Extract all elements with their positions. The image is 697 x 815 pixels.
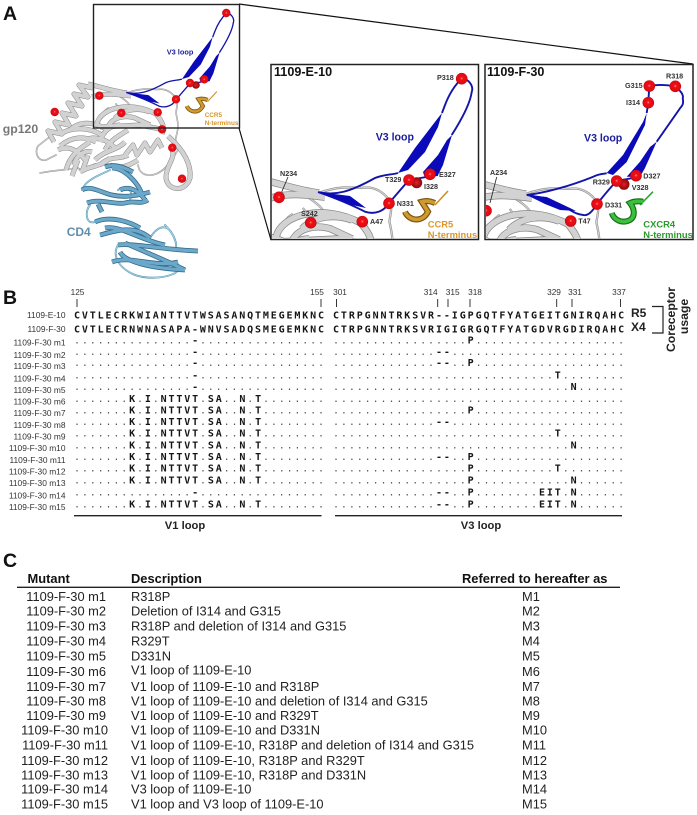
table: mutant column: 1109-F-30 m2 xyxy=(26,604,106,619)
sequence labels: 1109-F-30 m7 xyxy=(14,408,66,418)
table: mutant column: 1109-F-30 m15 xyxy=(21,796,108,811)
residue position numbers and ticks: 318 xyxy=(468,287,482,297)
CCR5 label: N-terminus xyxy=(428,229,477,240)
residue position numbers and ticks: 155 xyxy=(310,287,324,297)
CCR5 N-terminus helix xyxy=(405,191,448,219)
table: mutant column: 1109-F-30 m7 xyxy=(26,679,106,694)
table: description column: R318P xyxy=(131,589,170,604)
table: mutant column: 1109-F-30 m1 xyxy=(26,589,106,604)
V3 loop sequence alignment: .............--..P................... xyxy=(333,452,626,463)
residue position numbers and ticks: 315 xyxy=(446,287,460,297)
table: referred-to column: M2 xyxy=(522,604,540,619)
table header: Mutant xyxy=(28,571,70,586)
V3 loop label: V3 loop xyxy=(584,133,623,145)
V3 loop sequence alignment: .................P............N...... xyxy=(333,475,626,486)
table: referred-to column: M8 xyxy=(522,694,540,709)
residue labels: N331 xyxy=(397,199,414,208)
V1 loop sequence alignment: ...............-................ xyxy=(74,371,326,382)
sequence labels: 1109-F-30 m13 xyxy=(9,478,66,488)
table: referred-to column: M1 xyxy=(522,589,540,604)
table: mutant column: 1109-F-30 m6 xyxy=(26,664,106,679)
panel letter C: C xyxy=(3,550,17,572)
table header rule xyxy=(17,586,620,588)
overview labels xyxy=(3,47,239,239)
overview labels: V3 loop xyxy=(167,47,194,56)
table: referred-to column: M7 xyxy=(522,679,540,694)
table: description column xyxy=(131,589,474,811)
sequence labels xyxy=(9,310,66,512)
table: referred-to column: M10 xyxy=(522,722,547,737)
table: referred-to column xyxy=(522,589,547,811)
residue position numbers and ticks: 329 xyxy=(547,287,561,297)
sequence labels: 1109-F-30 m9 xyxy=(14,432,66,442)
table: referred-to column: M15 xyxy=(522,796,547,811)
CXCR4 label: CXCR4 xyxy=(643,219,676,230)
sequence labels: 1109-F-30 m1 xyxy=(14,338,66,348)
V1 loop sequence alignment: .......K.I.NTTVT.SA..N.T........ xyxy=(74,464,326,475)
ribbon: gp120 xyxy=(36,84,190,188)
panel letter B: B xyxy=(3,287,17,309)
gray ribbon backdrop xyxy=(272,178,394,239)
residue labels: N234 xyxy=(280,169,297,178)
sequence labels: 1109-F-30 m6 xyxy=(14,396,66,406)
V1 loop sequence alignment: .......K.I.NTTVT.SA..N.T........ xyxy=(74,405,326,416)
V1 loop sequence alignment: .......K.I.NTTVT.SA..N.T........ xyxy=(74,499,326,510)
V3 loop sequence alignment: ............................T........ xyxy=(333,429,626,440)
overview residue spheres xyxy=(50,9,230,183)
table header: Description xyxy=(131,571,202,586)
residue labels: T47 xyxy=(578,216,591,225)
coreceptor labels R5 and X4 xyxy=(631,306,647,334)
table: mutant column: 1109-F-30 m14 xyxy=(21,782,108,797)
residue labels: R329 xyxy=(593,177,610,186)
table: referred-to column: M12 xyxy=(522,753,547,768)
table: mutant column: 1109-F-30 m8 xyxy=(26,694,106,709)
connector lines: overview to detail panels xyxy=(239,4,693,240)
ribbon: CD4 xyxy=(82,166,198,278)
sequence labels: 1109-F-30 m3 xyxy=(14,361,66,371)
V3 loop sequence alignment: .............--...................... xyxy=(333,347,626,358)
table: description column: V1 loop of 1109-E-10 and D331N xyxy=(131,722,320,737)
sequence labels: 1109-F-30 m12 xyxy=(9,466,66,476)
V3 loop sequence alignment: .................P................... xyxy=(333,405,626,416)
V3 loop sequence alignment: CTRPGNNTRKSVR--IGPGQTFYATGEITGNIRQAHC xyxy=(333,310,626,321)
V3 loop in overview xyxy=(126,13,234,112)
V3 loop sequence alignment: .............--..P........EIT.N...... xyxy=(333,499,626,510)
table: mutant column: 1109-F-30 m5 xyxy=(26,648,106,663)
coreceptor usage label xyxy=(664,287,691,352)
residue position numbers and ticks: 331 xyxy=(568,287,582,297)
V3 loop ribbon xyxy=(527,85,683,215)
table: referred-to column: M13 xyxy=(522,767,547,782)
residue labels: A234 xyxy=(490,168,507,177)
table: mutant column: 1109-F-30 m12 xyxy=(21,753,108,768)
panel letter A: A xyxy=(3,3,17,25)
V1 loop sequence alignment: .......K.I.NTTVT.SA..N.T........ xyxy=(74,429,326,440)
V1 loop bracket and label: V1 loop xyxy=(165,520,205,532)
V1 loop sequence alignment xyxy=(74,310,326,510)
sequence labels: 1109-E-10 xyxy=(27,310,66,320)
sequence labels: 1109-F-30 m2 xyxy=(14,350,66,360)
V3 loop sequence alignment: .............--..P................... xyxy=(333,358,626,369)
coreceptor bracket xyxy=(652,306,663,333)
N234 leader line xyxy=(282,177,288,192)
V1 loop sequence alignment: .......K.I.NTTVT.SA..N.T........ xyxy=(74,440,326,451)
coreceptor usage label: usage xyxy=(677,299,691,334)
residue spheres xyxy=(480,80,681,227)
V3 loop sequence alignment: ............................T........ xyxy=(333,371,626,382)
table header: Referred to hereafter as xyxy=(462,571,607,586)
V1 loop sequence alignment: ...............-................ xyxy=(74,335,326,346)
sequence labels: 1109-F-30 m11 xyxy=(9,455,66,465)
table: referred-to column: M14 xyxy=(522,782,547,797)
V1 loop sequence alignment: ...............-................ xyxy=(74,347,326,358)
coreceptor usage label: Coreceptor xyxy=(664,287,678,352)
panel: 1109-E-10 detail xyxy=(270,64,480,240)
residue labels: R318 xyxy=(666,71,683,80)
overview labels: CCR5 xyxy=(205,112,223,119)
V3 loop sequence alignment: .................P..........T........ xyxy=(333,464,626,475)
table: mutant column xyxy=(21,589,108,811)
V3 loop ribbon xyxy=(318,79,472,213)
V1 loop sequence alignment: .......K.I.NTTVT.SA..N.T........ xyxy=(74,452,326,463)
residue labels: T329 xyxy=(385,175,401,184)
table: description column: V1 loop of 1109-E-10 and R329T xyxy=(131,708,319,723)
table: description column: V1 loop of 1109-E-10, R318P and deletion of I314 and G315 xyxy=(131,738,474,753)
sequence labels: 1109-F-30 m10 xyxy=(9,443,66,453)
panel: 1109-F-30 detail xyxy=(484,64,694,240)
CXCR4 N-terminus helix xyxy=(612,192,653,222)
CXCR4 label xyxy=(643,219,693,240)
table: description column: V1 loop of 1109-E-10 and R318P xyxy=(131,679,319,694)
table: description column: V3 loop of 1109-E-10 xyxy=(131,782,251,797)
overview labels: N-terminus xyxy=(205,120,239,127)
V3 loop sequence alignment: ..................................... xyxy=(333,394,626,405)
V3 loop sequence alignment: ..............................N...... xyxy=(333,440,626,451)
table: description column: R329T xyxy=(131,634,170,649)
residue spheres xyxy=(273,73,468,228)
residue labels: S242 xyxy=(301,209,318,218)
table: referred-to column: M4 xyxy=(522,634,540,649)
table: referred-to column: M9 xyxy=(522,708,540,723)
table: mutant column: 1109-F-30 m3 xyxy=(26,618,106,633)
overview labels: CD4 xyxy=(67,225,91,239)
residue labels: G315 xyxy=(625,81,643,90)
table: mutant column: 1109-F-30 m13 xyxy=(21,767,108,782)
A234 leader line xyxy=(490,177,497,203)
V1 loop sequence alignment: ...............-................ xyxy=(74,488,326,499)
table: description column: V1 loop of 1109-E-10 xyxy=(131,662,251,678)
V3 loop sequence alignment: .............--..P........EIT.N...... xyxy=(333,488,626,499)
table: description column: V1 loop and V3 loop of 1109-E-10 xyxy=(131,796,324,811)
coreceptor labels R5 and X4: R5 xyxy=(631,306,647,320)
table: description column: V1 loop of 1109-E-10, R318P and R329T xyxy=(131,753,365,768)
table: description column: V1 loop of 1109-E-10 and deletion of I314 and G315 xyxy=(131,694,428,709)
residue position numbers and ticks: 125 xyxy=(71,287,85,297)
residue position numbers and ticks: 314 xyxy=(424,287,438,297)
sequence labels: 1109-F-30 m4 xyxy=(14,374,66,384)
residue labels xyxy=(490,71,683,225)
V1 loop sequence alignment: .......K.I.NTTVT.SA..N.T........ xyxy=(74,417,326,428)
residue labels: A47 xyxy=(370,217,383,226)
sequence labels: 1109-F-30 m5 xyxy=(14,385,66,395)
V1 loop sequence alignment: CVTLECRKWIANTTVTWSASANQTMEGEMKNC xyxy=(74,310,326,321)
residue position numbers and ticks xyxy=(71,287,626,307)
table header xyxy=(28,571,607,586)
coreceptor labels R5 and X4: X4 xyxy=(631,320,646,334)
V1 loop sequence alignment: CVTLECRNWNASAPA-WNVSADQSMEGEMKNC xyxy=(74,324,326,335)
overview zoom box xyxy=(94,4,240,128)
V1 loop sequence alignment: ...............-................ xyxy=(74,358,326,369)
table: description column: V1 loop of 1109-E-10, R318P and D331N xyxy=(131,767,366,782)
table: referred-to column: M5 xyxy=(522,648,540,663)
V3 loop sequence alignment xyxy=(333,310,626,510)
CCR5 label: CCR5 xyxy=(428,219,453,230)
residue position numbers and ticks: 337 xyxy=(612,287,626,297)
residue labels: P318 xyxy=(437,73,454,82)
V1 loop sequence alignment: ...............-................ xyxy=(74,382,326,393)
residue labels: E327 xyxy=(439,170,456,179)
table: mutant column: 1109-F-30 m11 xyxy=(22,738,108,753)
sequence labels: 1109-F-30 m14 xyxy=(9,490,66,500)
residue labels: I314 xyxy=(626,98,640,107)
V3 loop label: V3 loop xyxy=(376,132,414,144)
panel title: 1109-F-30 xyxy=(487,65,544,79)
sequence labels: 1109-F-30 m8 xyxy=(14,420,66,430)
V3 loop sequence alignment: .............--...................... xyxy=(333,417,626,428)
table: description column: R318P and deletion of I314 and G315 xyxy=(131,618,346,633)
table: mutant column: 1109-F-30 m10 xyxy=(21,722,108,737)
residue labels: I328 xyxy=(424,182,438,191)
table: description column: Deletion of I314 and G315 xyxy=(131,604,281,619)
table: description column: D331N xyxy=(131,648,171,663)
V3 loop sequence alignment: CTRPGNNTRKSVRIGIGRGQTFYATGDVRGDIRQAHC xyxy=(333,324,626,335)
V1 loop sequence alignment: .......K.I.NTTVT.SA..N.T........ xyxy=(74,475,326,486)
residue labels: V328 xyxy=(632,183,648,192)
residue position numbers and ticks: 301 xyxy=(333,287,347,297)
residue labels: D331 xyxy=(605,200,622,209)
table: referred-to column: M6 xyxy=(522,664,540,679)
panel title: 1109-E-10 xyxy=(274,65,332,79)
sequence labels: 1109-F-30 xyxy=(27,324,66,334)
panel: overview gp120 and CD4 structure xyxy=(36,9,234,278)
overview labels: gp120 xyxy=(3,122,38,136)
V3 loop bracket and label: V3 loop xyxy=(461,520,501,532)
V1 loop sequence alignment: .......K.I.NTTVT.SA..N.T........ xyxy=(74,394,326,405)
V3 loop sequence alignment: ..............................N...... xyxy=(333,382,626,393)
CXCR4 label: N-terminus xyxy=(643,229,693,240)
V3 loop sequence alignment: .................P................... xyxy=(333,335,626,346)
sequence labels: 1109-F-30 m15 xyxy=(9,502,66,512)
gray ribbon backdrop xyxy=(486,181,600,239)
residue labels: D327 xyxy=(643,171,660,180)
table: referred-to column: M11 xyxy=(522,738,546,753)
table: mutant column: 1109-F-30 m4 xyxy=(26,634,106,649)
table: mutant column: 1109-F-30 m9 xyxy=(26,708,106,723)
CCR5 label xyxy=(428,219,477,240)
residue labels xyxy=(280,73,456,226)
table: referred-to column: M3 xyxy=(522,618,540,633)
